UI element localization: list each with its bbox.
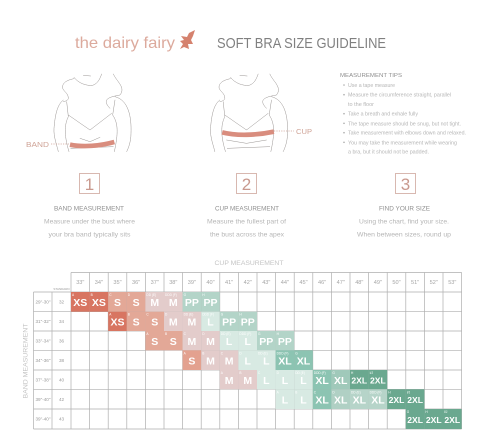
step 2: CUP MEASUREMENT [215, 206, 279, 212]
row: band 42: A [277, 390, 280, 394]
row: band 40: I/J [370, 371, 373, 375]
row: band 42: DDD (F) [370, 390, 381, 394]
measurement tips: to the floor [348, 102, 374, 108]
row: band 32: DD (E) [146, 293, 156, 297]
logo: the dairy fairy [75, 30, 195, 52]
row: band 40: XL [334, 375, 348, 387]
row headers: 42 [59, 397, 64, 402]
row: band 34: DD (E) [184, 313, 193, 317]
label: cup [274, 129, 312, 136]
column headers: 48" [355, 280, 363, 286]
row: band 42: DD (E) [351, 390, 361, 394]
row: band 42: I/J [407, 390, 411, 394]
row: band 36: L [226, 336, 233, 348]
step 2: Measure the fullest part of [207, 220, 286, 226]
row: band 32: B [91, 293, 93, 297]
row: band 40: 2XL [370, 375, 386, 385]
measurement tips: Measure the circumference straight, parallel [348, 93, 451, 99]
measuring band [222, 132, 274, 135]
row: band 40: L [263, 375, 270, 387]
step 3: 3 [401, 175, 410, 194]
row headers: 39"-40" [35, 416, 51, 422]
row: band 43: 2XL [426, 415, 442, 425]
row: band 40: B [239, 371, 242, 375]
row: band 36: M [206, 336, 215, 348]
row: band 38: C [221, 351, 224, 355]
row: band 38: S [188, 355, 195, 367]
row: band 38 [183, 350, 313, 370]
row: band 42: L [300, 394, 307, 406]
step 1: your bra band typically sits [48, 232, 130, 238]
measurement tips: Take a breath and exhale fully [348, 112, 418, 118]
row headers: 32 [59, 300, 64, 304]
row: band 40: D [277, 371, 280, 375]
row: band 40 [220, 370, 387, 389]
row: band 32: S [133, 297, 140, 309]
row: band 32: H [202, 293, 205, 297]
column headers [76, 280, 456, 286]
row: band 40: DD (E) [295, 371, 305, 375]
row: band 42: D [332, 390, 335, 394]
step 1 [44, 174, 136, 238]
row: band 32: PP [203, 297, 218, 309]
column headers: 40" [206, 280, 215, 286]
row: band 36: A [146, 332, 149, 336]
row: band 38: XL [278, 355, 292, 367]
row: band 34: A [109, 313, 112, 317]
measurement tips: You may take the measurement while wearing [348, 140, 457, 146]
measurement tips: The tape measure should be snug, but not tight. [348, 121, 461, 127]
row: band 32: XS [92, 297, 106, 309]
row: band 32: XS [73, 297, 87, 309]
row headers: 34"-36" [35, 358, 51, 363]
row: band 34: S [133, 316, 140, 328]
row headers: 38 [59, 358, 64, 363]
step 2: 2 [242, 175, 251, 194]
row headers: 36 [59, 338, 64, 343]
row: band 38: M [206, 355, 215, 367]
row: band 43: I/J [444, 410, 448, 414]
row: band 34: L [207, 316, 214, 328]
row: band 42 [276, 389, 424, 409]
axis title: band measurement: BAND MEASUREMENT [22, 323, 30, 398]
step 1: Measure under the bust where [44, 220, 136, 226]
measuring band [70, 142, 114, 146]
row: band 43: 2XL [407, 415, 423, 425]
step 3: Using the chart, find your size. [359, 220, 449, 226]
column headers: 34" [95, 280, 103, 286]
row: band 36: PP [259, 336, 273, 348]
row: band 42: B [295, 390, 297, 394]
row: band 40: M [243, 375, 252, 387]
measurement tips [340, 73, 466, 156]
row: band 34: DDD (F) [202, 313, 214, 317]
logo: the dairy fairy: the dairy fairy [75, 35, 175, 52]
row: band 40: XL [315, 375, 329, 387]
measurement tips: Use a tape measure [348, 83, 395, 89]
row: band 32: C [109, 293, 112, 297]
row: band 36 [145, 331, 294, 350]
row: band 42: L [282, 394, 289, 406]
row: band 32 [71, 292, 220, 312]
row: band 34: B [128, 313, 130, 317]
row headers: 43 [59, 416, 64, 422]
column headers: 39" [188, 280, 196, 286]
row: band 40: M [225, 375, 234, 387]
row: band 32: S [114, 297, 121, 309]
row: band 36: S [170, 336, 177, 348]
row: band 43: H [425, 410, 428, 414]
column headers: 43" [262, 280, 270, 286]
step 3 [357, 174, 452, 238]
row: band 40: G [332, 371, 335, 375]
label: cup: CUP [296, 129, 312, 136]
row: band 34: XS [110, 316, 125, 328]
axis title: cup measurement: CUP MEASUREMENT [214, 261, 284, 267]
row: band 40: L [300, 375, 307, 387]
row: band 32: M [150, 297, 159, 309]
row: band 34: M [169, 316, 178, 328]
row headers: 29"-30" [35, 300, 51, 304]
row: band 38: DDD (F) [277, 351, 288, 355]
column headers: 45" [299, 280, 308, 286]
title: SOFT BRA SIZE GUIDELINE [217, 35, 386, 52]
row: band 42: C [314, 390, 317, 394]
column headers: 46" [318, 280, 326, 286]
row: band 40: 2XL [351, 375, 367, 385]
row: band 34: S [151, 316, 158, 328]
row headers [35, 287, 70, 422]
row: band 34: M [188, 316, 197, 328]
column headers: 44" [281, 280, 289, 286]
row: band 36: DD (E) [221, 332, 231, 336]
step 2: the bust across the apex [210, 232, 284, 238]
column headers: 38" [169, 280, 177, 286]
row: band 32: G [184, 293, 187, 297]
label: band: BAND [26, 142, 49, 149]
row: band 32: D [128, 293, 131, 297]
row: band 38: M [225, 355, 234, 367]
row: band 43: 2XL [444, 415, 460, 425]
column headers: 51" [411, 280, 419, 286]
row: band 38: DD (E) [258, 351, 268, 355]
column headers: 47" [337, 280, 345, 286]
row: band 38: B [202, 351, 204, 355]
row: band 40: A [221, 371, 224, 375]
row: band 32: DDD (F) [165, 293, 177, 297]
step 1: 1 [85, 175, 94, 194]
row: band 34: D [165, 313, 168, 317]
row: band 38: L [244, 355, 251, 367]
column headers: 53" [448, 280, 456, 286]
row: band 42: XL [371, 394, 385, 406]
row: band 40: DDD (F) [314, 371, 326, 375]
row: band 34: H [239, 313, 242, 317]
row: band 36: C [184, 332, 187, 336]
row: band 36: PP [278, 336, 292, 348]
row: band 38: L [263, 355, 270, 367]
row: band 32: A [72, 293, 75, 297]
row: band 40: C [258, 371, 261, 375]
measurement tips: MEASUREMENT TIPS [340, 73, 402, 79]
row: band 36: S [151, 336, 158, 348]
measurement tips: Take measurement with elbows down and relaxed. [348, 131, 466, 137]
row: band 42: 2XL [389, 395, 404, 405]
row: band 36: L [244, 336, 251, 348]
row: band 34: PP [222, 316, 236, 328]
row headers: 37"-38" [35, 377, 51, 382]
size chart [34, 272, 462, 429]
row: band 42: XL [315, 394, 329, 406]
row headers: 40 [59, 377, 64, 382]
row headers: 39"-40" [35, 397, 51, 402]
row headers: 33"-34" [35, 338, 51, 343]
icon: fairy [180, 30, 195, 49]
row headers: 31"-32" [35, 319, 51, 324]
row: band 34 [108, 312, 257, 331]
row: band 38: G [295, 351, 298, 355]
row: band 32: PP [185, 297, 199, 309]
column headers: 36" [132, 280, 140, 286]
column headers: 52" [430, 280, 438, 286]
column headers: 42" [244, 280, 252, 286]
row: band 36: B [165, 332, 167, 336]
row: band 32: M [169, 297, 178, 309]
step 3: FIND YOUR SIZE [379, 206, 430, 212]
row: band 36: H [277, 332, 280, 336]
row: band 43 [406, 409, 462, 429]
illustration: cup measurement figure [210, 74, 288, 152]
label: band [26, 142, 69, 149]
row: band 34: PP [241, 316, 255, 328]
row headers: STANDARD [53, 287, 70, 291]
row: band 36: DDD (F) [239, 332, 251, 336]
column headers: 33" [76, 280, 84, 286]
column headers: 41" [225, 280, 233, 286]
column headers: 50" [392, 280, 401, 286]
row: band 42: XL [353, 394, 367, 406]
row: band 36: G [258, 332, 261, 336]
step 2 [207, 174, 286, 238]
row: band 38: XL [297, 355, 311, 367]
row: band 34: G [221, 313, 224, 317]
row: band 36: M [188, 336, 197, 348]
row: band 42: XL [334, 394, 348, 406]
row: band 34: C [146, 313, 149, 317]
step 1: BAND MEASUREMENT [54, 206, 124, 212]
row headers: 34 [59, 319, 64, 324]
column headers: 49" [374, 280, 382, 286]
row: band 40: H [351, 371, 354, 375]
row: band 42: H [388, 390, 391, 394]
row: band 42: 2XL [407, 395, 423, 405]
row: band 36: D [202, 332, 205, 336]
row: band 38: D [239, 351, 242, 355]
column headers: 37" [151, 280, 159, 286]
row: band 43: G [407, 410, 410, 414]
illustration: band measurement figure [54, 74, 131, 152]
step 3: When between sizes, round up [357, 232, 452, 238]
measurement tips: a bra, but it should not be padded. [348, 150, 429, 156]
row: band 40: L [282, 375, 289, 387]
column headers: 35" [113, 280, 122, 286]
row: band 38: A [184, 351, 187, 355]
